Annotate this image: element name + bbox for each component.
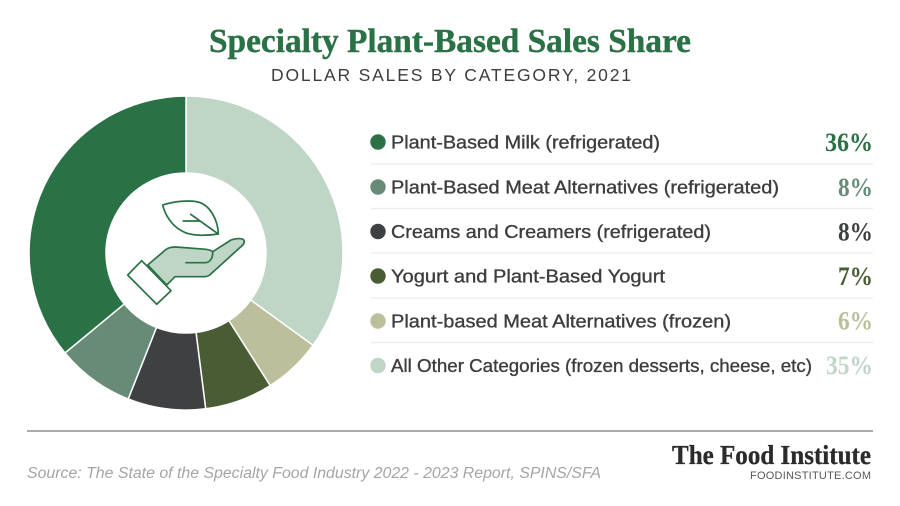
- donut chart: [29, 96, 343, 410]
- brand url: FOODINSTITUTE.COM: [750, 470, 871, 482]
- row: creams and creamers: [370, 218, 873, 246]
- legend table: [370, 128, 873, 380]
- row: plant-based milk: [370, 128, 873, 157]
- segment: plant-based milk 36%: [29, 96, 186, 353]
- row: yogurt: [370, 262, 873, 291]
- row: all other categories: All Other Categories (frozen desserts, cheese, etc): [391, 355, 812, 376]
- leaf vein: [183, 214, 218, 234]
- row: yogurt: 7%: [838, 262, 873, 291]
- row: plant-based milk: 36%: [825, 128, 873, 157]
- source note: Source: The State of the Specialty Food Industry 2022 - 2023 Report, SPINS/SFA: [27, 465, 601, 482]
- row: plant-based meat alternatives frozen: [370, 306, 873, 336]
- brand logo: [672, 440, 871, 482]
- brand name: The Food Institute: [672, 440, 871, 470]
- row: plant-based meat alternatives frozen: 6%: [838, 306, 873, 336]
- title: Specialty Plant-Based Sales Share: [209, 23, 691, 60]
- subtitle: DOLLAR SALES BY CATEGORY, 2021: [271, 65, 631, 85]
- segment: plant-based meat alternatives refrigerated 8%: [65, 304, 156, 399]
- hand inner line: [186, 252, 213, 263]
- row: all other categories: [370, 351, 873, 380]
- segment: all other categories 35%: [186, 96, 343, 345]
- leaf outline: [163, 201, 218, 235]
- row: all other categories: 35%: [826, 351, 873, 380]
- row: plant-based meat alternatives refrigerated: Plant-Based Meat Alternatives (refrigerated): [391, 176, 779, 198]
- row: plant-based meat alternatives refrigerated: [370, 173, 873, 202]
- cuff: [128, 261, 171, 304]
- row: creams and creamers: Creams and Creamers (refrigerated): [391, 221, 711, 242]
- segment: yogurt 7%: [196, 321, 270, 409]
- row: yogurt: Yogurt and Plant-Based Yogurt: [391, 266, 665, 286]
- hand: [148, 239, 244, 285]
- segment: plant-based meat alternatives frozen 6%: [229, 300, 313, 386]
- row: plant-based meat alternatives refrigerated: 8%: [838, 173, 873, 202]
- icon: hand holding leaf: [128, 201, 244, 304]
- row: plant-based milk: Plant-Based Milk (refrigerated): [391, 132, 660, 152]
- row: plant-based meat alternatives frozen: Plant-based Meat Alternatives (frozen): [391, 310, 731, 332]
- segment: creams and creamers 8%: [128, 327, 206, 410]
- row: creams and creamers: 8%: [838, 218, 873, 246]
